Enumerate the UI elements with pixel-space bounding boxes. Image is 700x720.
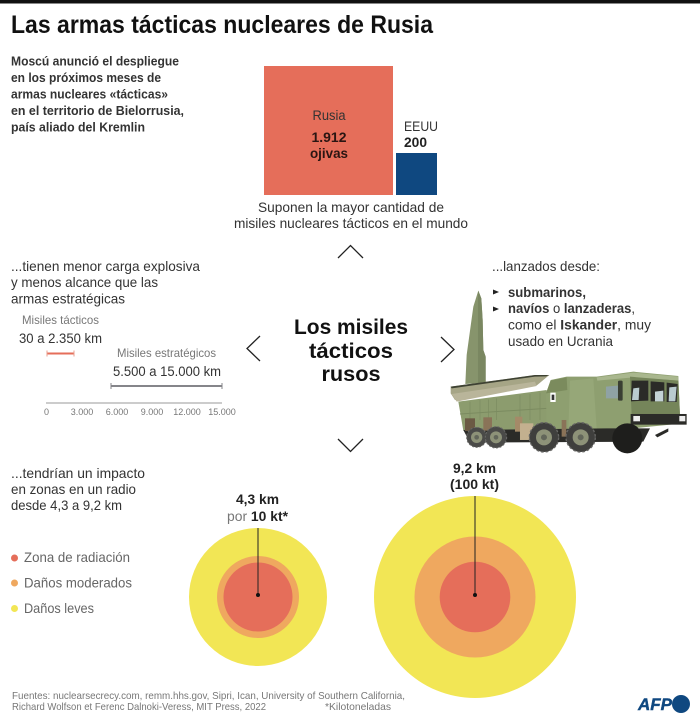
text: launched from [492,258,651,349]
text: lower yield [11,258,200,306]
central heading: Los misiles [294,316,408,339]
legend item: light: Daños leves [24,600,94,616]
sources footer [12,690,405,713]
text: impact radius: en zonas en un radio [11,481,136,497]
truck body [458,390,547,431]
windows [631,381,648,401]
label: Russia: ojivas [310,146,348,161]
launcher deck [451,375,549,400]
range: strategic missiles: 5.500 a 15.000 km [113,364,221,379]
label: 4.3 km: 4,3 km [236,492,279,507]
axis: 3.000 [71,407,93,417]
text: impact radius: ...tendrían un impacto [11,465,145,481]
sources footer: *Kilotoneladas [325,701,391,713]
label: Russia: Rusia [312,108,346,123]
range: strategic missiles [111,346,222,389]
arrow: down [338,439,363,452]
chart: warheads Russia vs USA [264,66,438,195]
arrow: up [338,246,363,258]
label: Russia [310,108,348,161]
label: 4.3 km: por 10 kt* [227,509,289,524]
chart: 10 kt impact circles [189,492,327,666]
intro text: armas nucleares «tácticas» [11,88,168,102]
chassis [463,428,650,443]
text: lower yield: y menos alcance que las [11,274,158,290]
chart caption [234,199,468,231]
label: 9.2 km: 9,2 km [453,461,496,476]
missile [465,291,486,384]
title: Las armas tácticas nucleares de Rusia [11,11,434,39]
bullet [493,290,499,294]
text: launched from: ...lanzados desde: [492,258,600,274]
intro text: Moscú anunció el despliegue [11,54,179,68]
label: Russia: 1.912 [312,130,346,145]
text: lower yield: armas estratégicas [11,290,125,306]
icon: Iskander launcher truck [451,291,687,453]
range: tactical missiles: 30 a 2.350 km [19,331,102,346]
intro text: país aliado del Kremlin [11,120,145,134]
wheels [467,423,642,453]
legend item: radiation: Zona de radiación [24,549,130,565]
bar: USA [396,153,437,195]
axis: 0 [44,407,49,417]
intro text: en los próximos meses de [11,71,161,85]
text: launched from: usado en Ucrania [508,333,613,349]
AFP logo [637,695,690,714]
axis: 9.000 [141,407,163,417]
chart caption: Suponen la mayor cantidad de [258,199,444,215]
central heading [294,316,408,386]
AFP logo: AFP [637,695,673,714]
axis [44,403,236,417]
text: launched from: submarinos, [508,284,586,300]
central heading: rusos [322,363,380,386]
axis: 12.000 [173,407,201,417]
intro text [11,54,184,134]
label: 4.3 km [227,492,289,524]
text: impact radius [11,465,145,513]
sources footer: Fuentes: nuclearsecrecy.com, remm.hhs.gov, Sipri, Ican, University of Southern California, [12,690,405,702]
text: launched from: navíos o lanzaderas, [508,300,635,316]
arrow: right [441,337,454,362]
axis: 6.000 [106,407,128,417]
legend [11,549,132,616]
bar: Russia [264,66,393,195]
central heading: tácticos [309,340,393,363]
label: USA: 200 [404,135,427,150]
text: launched from: como el Iskander, muy [508,316,651,332]
intro text: en el territorio de Bielorrusia, [11,104,184,118]
label: USA [404,119,438,150]
chart caption: misiles nucleares tácticos en el mundo [234,215,468,231]
chart: missile range [19,313,236,417]
legend item: moderate: Daños moderados [24,574,132,590]
bullet [493,306,499,312]
bumper [631,414,687,425]
range: tactical missiles [19,313,102,356]
sources footer: Richard Wolfson et Ferenc Dalnoki-Veress, MIT Press, 2022 [12,701,266,713]
label: 9.2 km: (100 kt) [450,477,499,492]
arrow: left [247,336,260,361]
axis: 15.000 [208,407,236,417]
text: lower yield: ...tienen menor carga explosiva [11,258,200,274]
text: impact radius: desde 4,3 a 9,2 km [11,497,122,513]
chart: 100 kt impact circles [374,461,576,698]
label: 9.2 km [450,461,499,492]
cab [546,372,683,431]
label: USA: EEUU [404,119,438,134]
range: tactical missiles: Misiles tácticos [22,313,99,327]
range: strategic missiles: Misiles estratégicos [117,346,216,360]
